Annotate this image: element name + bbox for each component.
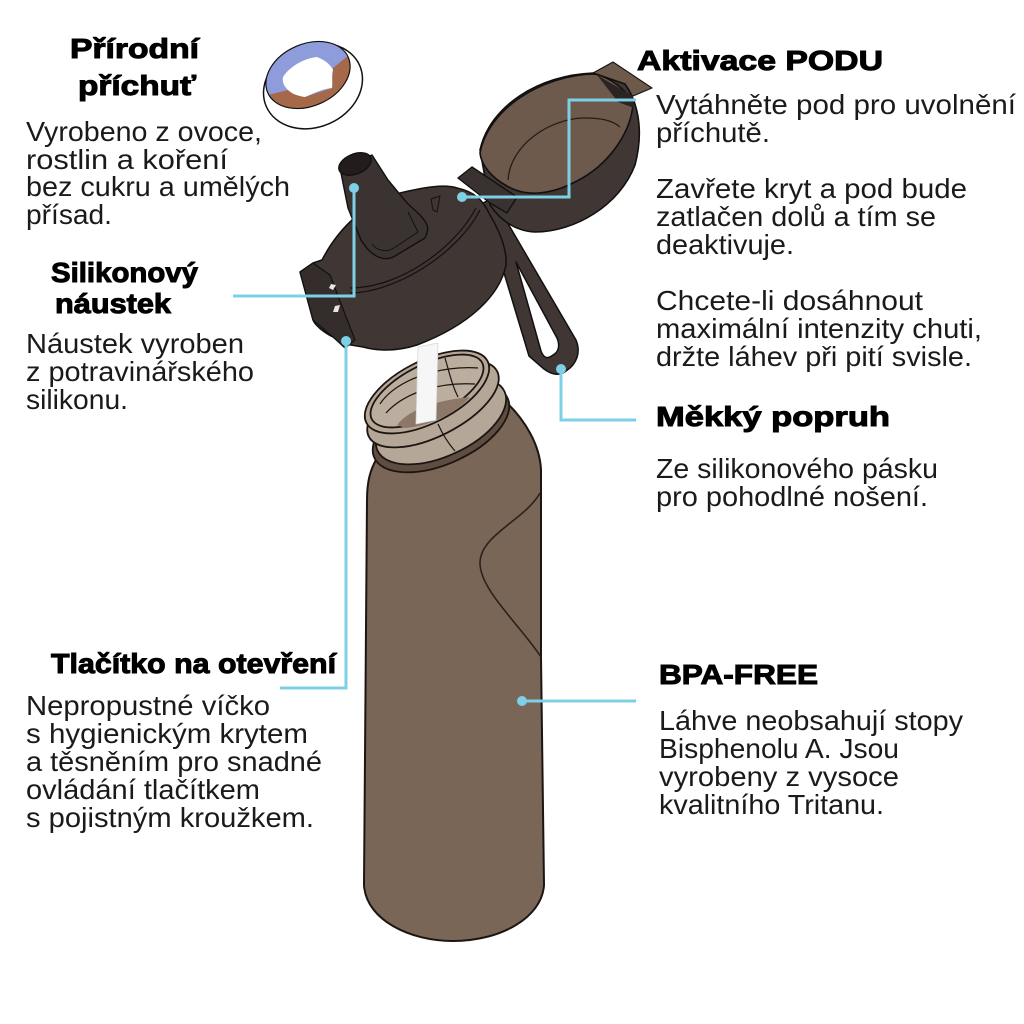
bottle body [364, 402, 544, 941]
text: pod activation: Zavřete kryt a pod bude [656, 173, 967, 204]
line: BPA free [522, 700, 636, 702]
bottle grip contour [480, 493, 541, 657]
heading: natural flavour [70, 33, 200, 101]
spout [340, 155, 428, 259]
front latch [300, 263, 355, 348]
heading: BPA free: BPA-FREE [659, 659, 818, 690]
text: open button: s hygienickým krytem [26, 718, 308, 749]
text: open button: ovládání tlačítkem [26, 774, 260, 805]
vent mark [431, 196, 440, 212]
text: BPA free: vyrobeny z vysoce [659, 761, 899, 792]
lid tab [593, 62, 652, 96]
text: natural flavour: bez cukru a umělých [26, 171, 290, 202]
connector dots [341, 183, 566, 706]
text: BPA free: Láhve neobsahují stopy [659, 705, 963, 736]
text: pod activation: zatlačen dolů a tím se [656, 201, 936, 232]
heading: natural flavour: Přírodní [70, 33, 200, 64]
text: natural flavour: přísad. [26, 199, 112, 230]
pod ring outline [255, 29, 361, 121]
line: pod activation [462, 100, 636, 197]
cap body [300, 148, 506, 350]
carrying strap [483, 198, 578, 374]
lid hinge [458, 167, 517, 213]
flavour pod [262, 40, 364, 130]
lid interior [480, 74, 633, 193]
pod brown segment [269, 56, 350, 108]
text: pod activation: deaktivuje. [656, 229, 794, 260]
text: BPA free: Bisphenolu A. Jsou [659, 733, 899, 764]
lid [458, 62, 652, 232]
text: natural flavour: rostlin a koření [26, 144, 228, 175]
pod centre [283, 57, 333, 97]
heading: open button: Tlačítko na otevření [51, 648, 337, 679]
text: soft strap [656, 453, 938, 512]
text: BPA free: kvalitního Tritanu. [659, 789, 884, 820]
straw [416, 343, 438, 424]
heading: soft strap: Měkký popruh [656, 401, 890, 432]
heading: silicone mouthpiece: Silikonový [51, 257, 198, 288]
text: open button: s pojistným kroužkem. [26, 802, 314, 833]
heading: silicone mouthpiece: náustek [55, 288, 171, 319]
text: pod activation: maximální intenzity chuti, [656, 313, 982, 344]
pod outer shell [250, 28, 376, 144]
text: open button [26, 690, 322, 833]
text: pod activation: držte láhev při pití svisle. [656, 341, 972, 372]
line: silicone mouthpiece [233, 188, 354, 296]
line: open button [280, 341, 346, 688]
heading: pod activation: Aktivace PODU [637, 45, 883, 76]
text: silicone mouthpiece: silikonu. [26, 384, 128, 415]
text: pod activation [656, 89, 1016, 372]
text: soft strap: Ze silikonového pásku [656, 453, 938, 484]
connector lines [233, 100, 636, 701]
text: open button: Nepropustné víčko [26, 690, 270, 721]
text: BPA free [659, 705, 963, 820]
text: pod activation: příchutě. [656, 117, 770, 148]
pod ring [255, 29, 361, 121]
heading: natural flavour: příchuť [78, 70, 197, 101]
text: natural flavour [26, 116, 290, 230]
text: silicone mouthpiece: z potravinářského [26, 356, 254, 387]
text: pod activation: Chcete-li dosáhnout [656, 285, 923, 316]
text: silicone mouthpiece [26, 328, 254, 415]
text: silicone mouthpiece: Náustek vyroben [26, 328, 244, 359]
text: soft strap: pro pohodlné nošení. [656, 481, 928, 512]
text: natural flavour: Vyrobeno z ovoce, [26, 116, 262, 147]
text: pod activation: Vytáhněte pod pro uvolnění [656, 89, 1016, 120]
bottle neck rings [352, 334, 522, 491]
line: soft strap [561, 369, 636, 420]
heading: silicone mouthpiece [51, 257, 198, 319]
text: open button: a těsněním pro snadné [26, 746, 322, 777]
lid shell [480, 73, 639, 232]
bottle illustration [300, 62, 652, 941]
cap rim lines [350, 208, 480, 293]
